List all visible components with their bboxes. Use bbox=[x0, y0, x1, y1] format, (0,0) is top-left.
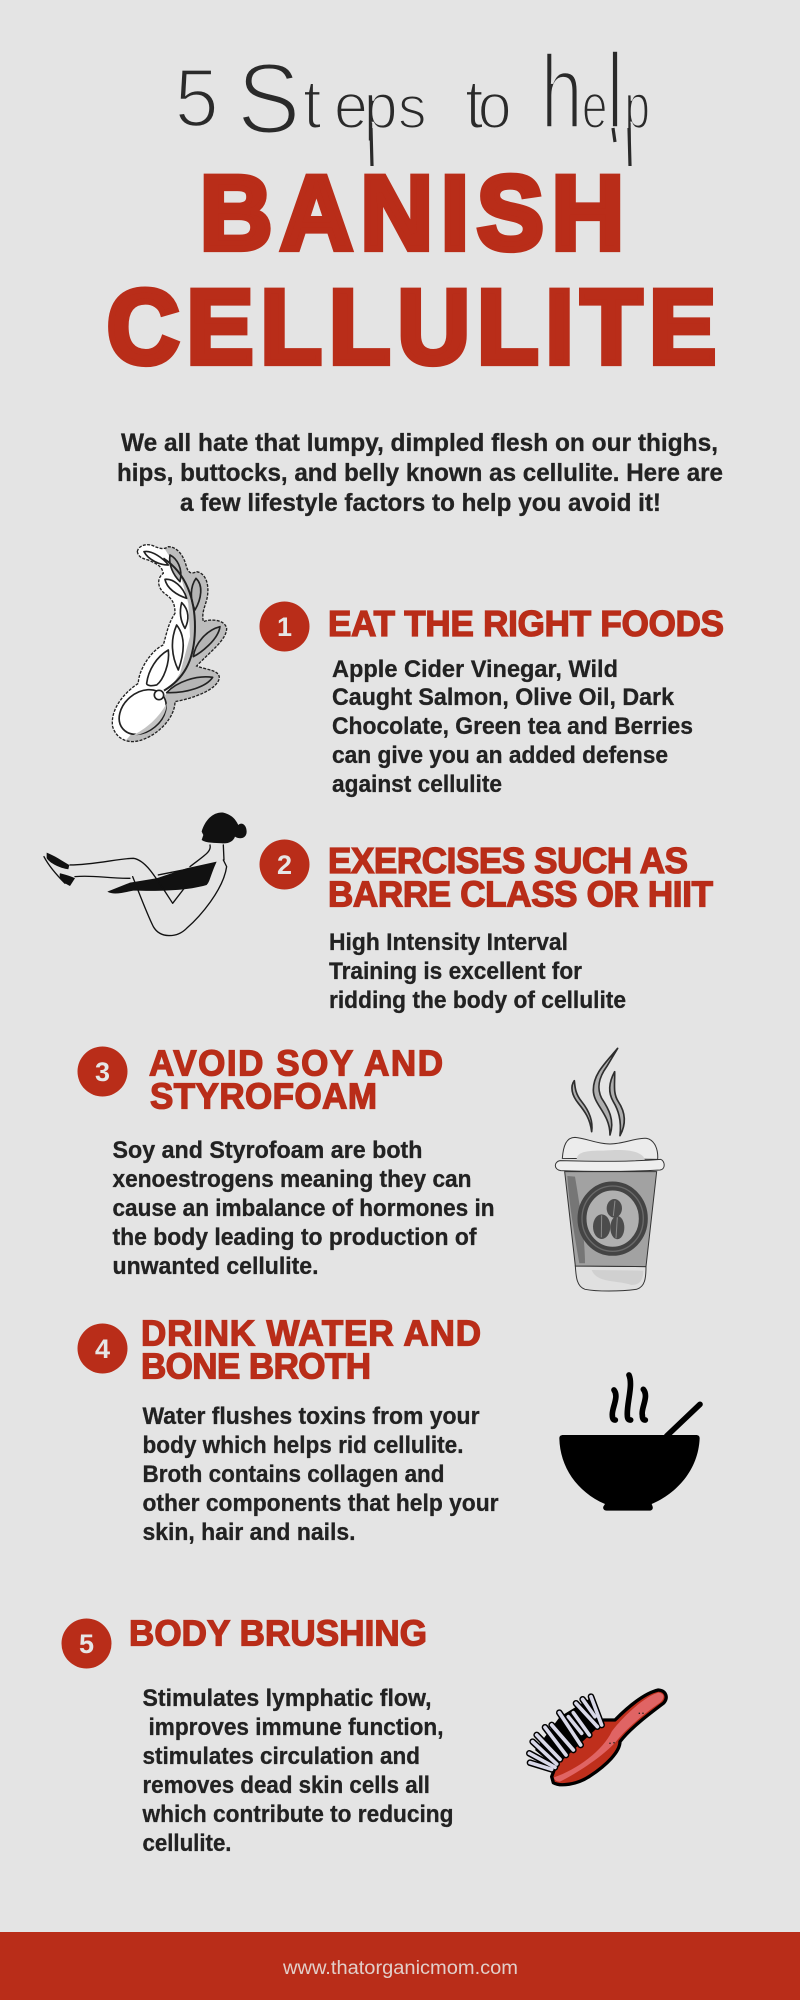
body 1: against cellulite bbox=[332, 771, 502, 798]
badge 1 bbox=[260, 602, 310, 652]
title script line: l bbox=[606, 30, 624, 151]
icon: body brush bbox=[529, 1690, 666, 1785]
heading 2 bbox=[328, 842, 713, 915]
footer bar bbox=[0, 1932, 800, 2000]
body 5: which contribute to reducing bbox=[142, 1801, 454, 1828]
body 3: cause an imbalance of hormones in bbox=[112, 1195, 494, 1222]
badge 3 bbox=[78, 1046, 128, 1096]
body 5: Stimulates lymphatic flow, bbox=[142, 1685, 432, 1712]
body 5: removes dead skin cells all bbox=[142, 1772, 430, 1799]
heading 3 bbox=[149, 1044, 443, 1117]
body 2 bbox=[329, 929, 626, 1014]
icon: steaming bowl bbox=[559, 1375, 700, 1511]
heading 1: EAT THE RIGHT FOODS bbox=[328, 605, 724, 644]
heading 3: STYROFOAM bbox=[150, 1077, 377, 1117]
title cellulite: CELLULITE bbox=[107, 268, 716, 386]
title script line bbox=[175, 30, 650, 166]
body 2: High Intensity Interval bbox=[329, 929, 568, 956]
icon: coffee cup bbox=[555, 1048, 664, 1291]
icon: woman doing exercise bbox=[44, 813, 247, 936]
body 3: unwanted cellulite. bbox=[112, 1253, 318, 1280]
heading 4: DRINK WATER AND bbox=[141, 1314, 481, 1354]
badge 4: 4 bbox=[95, 1334, 110, 1364]
heading 5: BODY BRUSHING bbox=[129, 1614, 427, 1654]
heading 4 bbox=[141, 1314, 481, 1387]
intro text: We all hate that lumpy, dimpled flesh on our thighs, bbox=[121, 429, 718, 457]
badge 4 bbox=[78, 1324, 128, 1374]
title script line: p bbox=[624, 71, 650, 142]
intro text bbox=[117, 429, 723, 517]
body 1: Apple Cider Vinegar, Wild bbox=[332, 656, 618, 683]
body 1: Chocolate, Green tea and Berries bbox=[332, 713, 693, 740]
panel: step 1 bbox=[260, 602, 724, 798]
heading 3: AVOID SOY AND bbox=[149, 1044, 443, 1084]
body 4: Broth contains collagen and bbox=[142, 1461, 444, 1488]
body 5: stimulates circulation and bbox=[142, 1743, 420, 1770]
title script line: t bbox=[465, 65, 483, 143]
body 5 bbox=[142, 1685, 454, 1857]
intro text: a few lifestyle factors to help you avoid it! bbox=[180, 489, 661, 517]
heading 2: BARRE CLASS OR HIIT bbox=[328, 875, 713, 915]
footer url: www.thatorganicmom.com bbox=[282, 1958, 518, 1979]
heading 2: EXERCISES SUCH AS bbox=[328, 842, 688, 881]
panel: step 5 bbox=[62, 1614, 454, 1857]
title script line: e bbox=[582, 71, 607, 142]
body 4: body which helps rid cellulite. bbox=[142, 1432, 464, 1459]
body 1 bbox=[332, 656, 693, 798]
panel: step 3 bbox=[78, 1044, 494, 1280]
title script line: p bbox=[364, 71, 398, 142]
title script line: t bbox=[303, 65, 322, 143]
badge 2 bbox=[260, 840, 310, 890]
badge 5 bbox=[62, 1618, 112, 1668]
body 1: can give you an added defense bbox=[332, 742, 668, 769]
title script line: o bbox=[478, 71, 512, 142]
title script line: S bbox=[237, 43, 300, 155]
heading 4: BONE BROTH bbox=[141, 1347, 371, 1387]
body 4: skin, hair and nails. bbox=[142, 1519, 356, 1546]
body 3: Soy and Styrofoam are both bbox=[112, 1137, 422, 1164]
badge 1: 1 bbox=[277, 612, 292, 642]
body 2: Training is excellent for bbox=[329, 958, 582, 985]
title banish: BANISH bbox=[200, 154, 624, 272]
body 3 bbox=[112, 1137, 494, 1280]
badge 3: 3 bbox=[95, 1057, 110, 1087]
title script line: h bbox=[541, 34, 583, 151]
body 2: ridding the body of cellulite bbox=[329, 987, 626, 1014]
badge 2: 2 bbox=[277, 850, 292, 880]
body 5: cellulite. bbox=[142, 1830, 232, 1857]
title script line: s bbox=[398, 75, 442, 141]
panel: step 4 bbox=[78, 1314, 498, 1546]
body 4 bbox=[142, 1403, 498, 1546]
title script line: e bbox=[334, 71, 368, 142]
title bbox=[107, 30, 716, 386]
intro text: hips, buttocks, and belly known as cellulite. Here are bbox=[117, 459, 723, 487]
panel: step 2 bbox=[260, 840, 713, 1014]
body 1: Caught Salmon, Olive Oil, Dark bbox=[332, 684, 675, 711]
body 5: improves immune function, bbox=[148, 1714, 444, 1741]
body 3: xenoestrogens meaning they can bbox=[112, 1166, 472, 1193]
badge 5: 5 bbox=[79, 1629, 94, 1659]
body 4: other components that help your bbox=[142, 1490, 498, 1517]
body 3: the body leading to production of bbox=[112, 1224, 477, 1251]
icon: olive branch sticker bbox=[110, 540, 233, 744]
title script line: 5 bbox=[175, 52, 241, 144]
body 4: Water flushes toxins from your bbox=[142, 1403, 480, 1430]
